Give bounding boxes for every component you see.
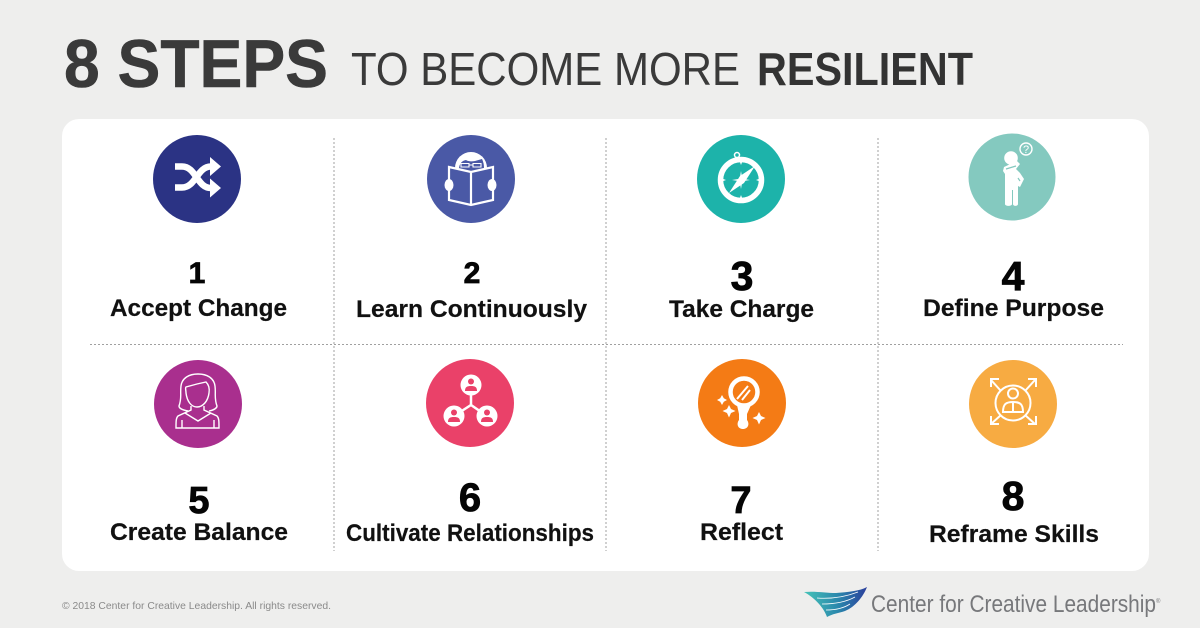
step number 1: 1 [189,257,205,290]
step label: Take Charge [669,296,814,323]
step number 4: 4 [1002,253,1025,299]
icon: shuffle arrows [153,135,241,223]
icon: compass [697,135,785,223]
step label: Reframe Skills [929,521,1099,548]
logo: Center for Creative Leadership [804,587,1161,618]
step number 2: 2 [464,257,480,290]
registered mark: ® [1156,598,1161,605]
title [64,26,973,102]
step number 5: 5 [188,480,210,522]
title: 8 STEPS [64,26,328,102]
step label: Learn Continuously [356,296,588,323]
title: TO BECOME MORE [351,43,740,95]
title: RESILIENT [757,43,973,95]
icon: thinking person: ? [1023,144,1029,156]
step number 8: 8 [1002,473,1024,519]
panel: steps card [62,119,1149,571]
step 6: Cultivate Relationships [346,359,594,547]
copyright note: © 2018 Center for Creative Leadership. All rights reserved. [62,600,331,612]
step label: Accept Change [110,295,287,322]
icon: woman outline [154,360,242,448]
icon: connected people [426,359,514,447]
step label: Create Balance [110,519,288,546]
step 2: Learn Continuously [356,135,588,323]
icon: person reading book [427,135,515,223]
step 3: Take Charge [669,135,814,323]
step label: Reflect [700,519,783,546]
step 4: Define Purpose [923,134,1104,322]
step 5: Create Balance [110,360,288,546]
step label: Define Purpose [923,295,1104,322]
step number 7: 7 [730,480,752,522]
step number 3: 3 [731,253,753,299]
step label: Cultivate Relationships [346,520,594,547]
icon: thinking person [968,134,1056,220]
step 8: Reframe Skills [929,360,1099,548]
step 1: Accept Change [110,135,287,322]
icon: person with outward arrows [969,360,1057,448]
step number 6: 6 [459,476,481,520]
logo wing mark [804,587,867,617]
icon: hand mirror [698,359,786,447]
step 7: Reflect [698,359,786,546]
logo wordmark: Center for Creative Leadership [871,591,1156,618]
